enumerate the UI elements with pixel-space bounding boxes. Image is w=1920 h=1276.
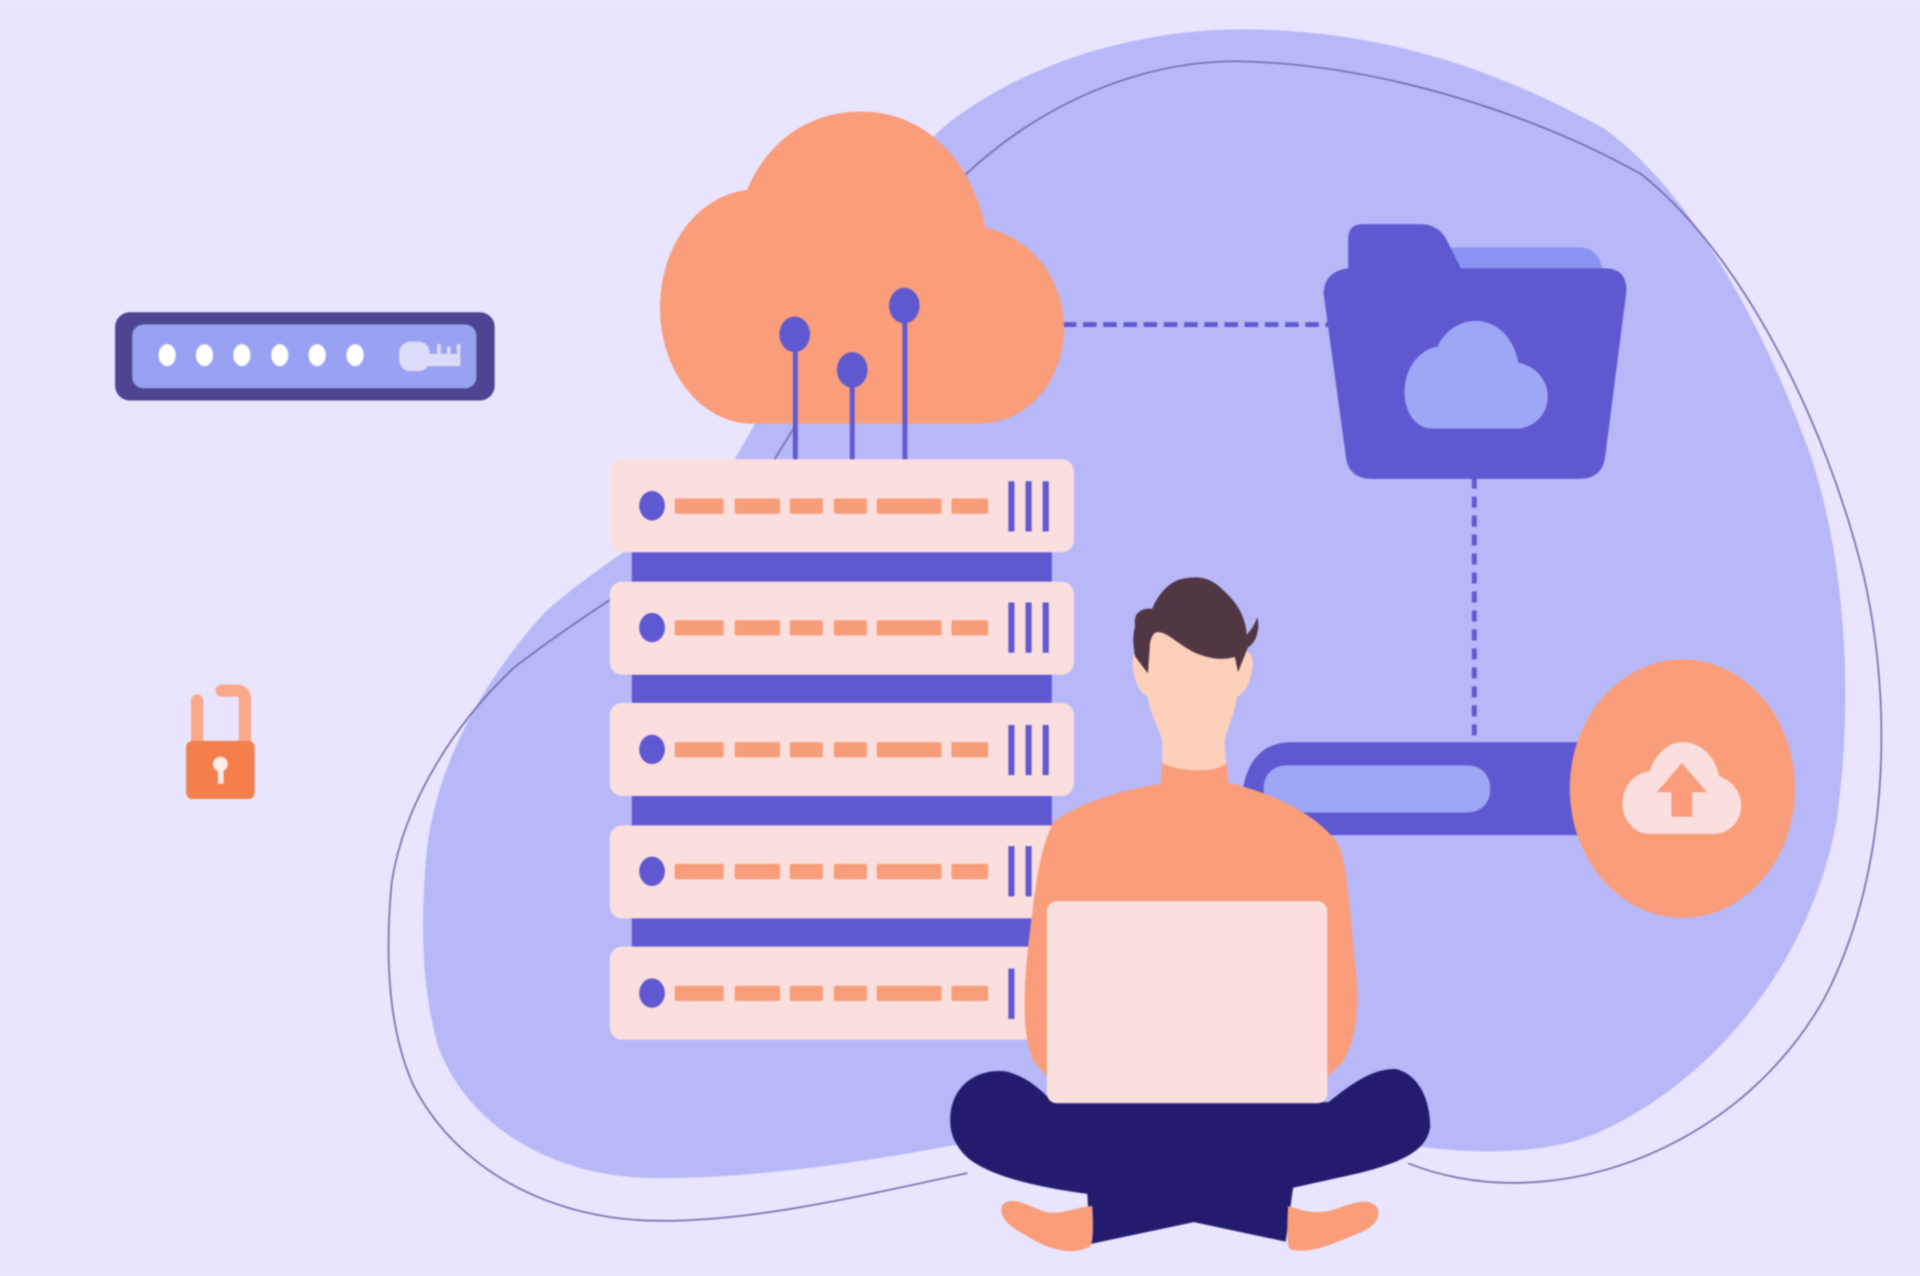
- icon: open padlock: [186, 691, 255, 799]
- icon: key: [399, 342, 460, 371]
- password field: [115, 312, 495, 400]
- sweater torso and arms: [1025, 763, 1358, 1084]
- right foot: [1287, 1202, 1378, 1251]
- rack connectors: [632, 545, 1052, 949]
- password dots: [159, 344, 364, 366]
- server unit 5: [610, 947, 1074, 1040]
- server unit 1: [610, 459, 1074, 552]
- icon: upload circle: [1570, 659, 1795, 918]
- legs: [950, 1069, 1430, 1244]
- laptop: [1047, 901, 1327, 1103]
- thin outline around blob: [389, 61, 1881, 1221]
- progress bar: [1243, 742, 1592, 835]
- person: [950, 577, 1430, 1251]
- background blob: [423, 29, 1845, 1178]
- icon: cloud folder: [1324, 224, 1626, 479]
- icon: cloud with antennae: [660, 111, 1064, 460]
- left foot: [1001, 1201, 1093, 1251]
- dashed connectors: [1063, 325, 1474, 742]
- server unit 3: [610, 703, 1074, 796]
- hair: [1133, 577, 1258, 674]
- server unit 2: [610, 582, 1074, 675]
- server unit 4: [610, 825, 1074, 918]
- server rack: [610, 459, 1074, 1040]
- ears, face and neck: [1133, 625, 1253, 779]
